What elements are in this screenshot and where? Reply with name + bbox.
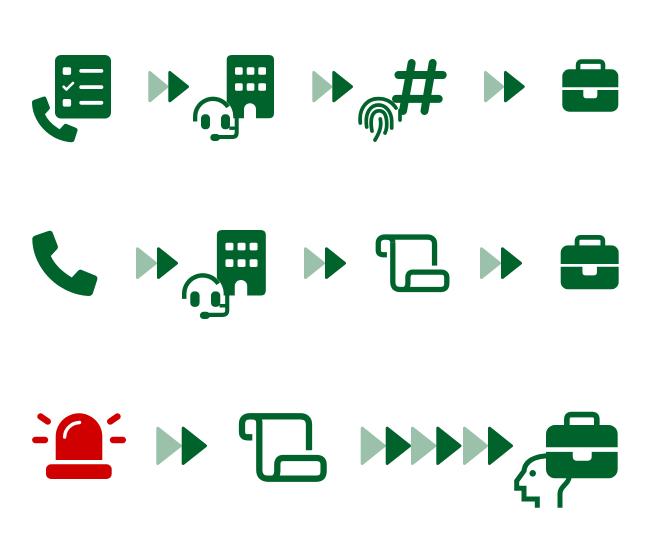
siren rays bbox=[35, 416, 123, 440]
fingerprint bbox=[360, 99, 400, 140]
arrow: row 1 second double arrow bbox=[314, 72, 352, 101]
siren dome bbox=[56, 413, 102, 460]
icon: hash with fingerprint bbox=[354, 63, 443, 144]
small phone handset bbox=[32, 97, 78, 142]
icon: building with headset, row 2 bbox=[182, 230, 266, 319]
checklist document bbox=[55, 55, 111, 118]
icon: large phone handset, row 2 bbox=[32, 231, 97, 296]
arrow: row 2 second double arrow bbox=[306, 249, 344, 278]
icon: red alarm siren bbox=[35, 413, 123, 479]
icon: scroll, row 3 bbox=[242, 416, 324, 479]
arrow: row 1 first double arrow bbox=[150, 72, 188, 101]
siren base bbox=[46, 464, 112, 479]
arrow: row 1 third double arrow bbox=[486, 72, 523, 101]
head outline bbox=[517, 456, 569, 508]
icon: phone with checklist bbox=[32, 55, 111, 142]
icon: scroll, row 2 bbox=[378, 237, 447, 289]
siren highlight bbox=[65, 422, 80, 437]
large briefcase bbox=[546, 415, 618, 478]
icon: building with headset, row 1 bbox=[193, 55, 274, 141]
hash sign bbox=[396, 63, 443, 111]
arrow: row 3 first double arrow bbox=[158, 428, 206, 464]
arrow: row 3 triple double arrow bbox=[362, 428, 512, 464]
arrow: row 2 first double arrow bbox=[138, 249, 176, 278]
icon: person head with briefcase bbox=[517, 415, 618, 508]
icon: briefcase, row 1 bbox=[562, 62, 618, 112]
arrow: row 2 third double arrow bbox=[482, 249, 520, 278]
icon: briefcase, row 2 bbox=[561, 237, 619, 289]
